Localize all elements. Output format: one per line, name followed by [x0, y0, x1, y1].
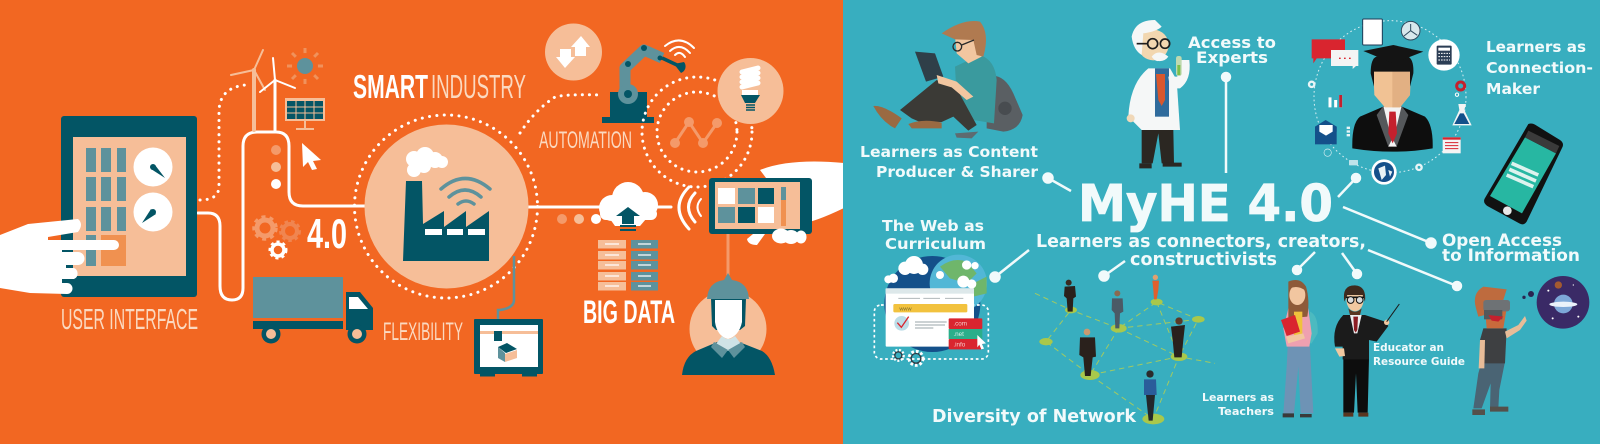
connector lines — [198, 85, 671, 300]
icon: server stacks — [598, 240, 658, 290]
figure: graduate with icons — [1309, 19, 1472, 185]
figure: vr user — [1472, 276, 1589, 415]
connector pins — [990, 73, 1461, 290]
text: learners as teachers: Teachers — [1218, 406, 1274, 418]
icon: light bulb — [718, 58, 784, 124]
dotted rings around trend chart — [642, 77, 752, 187]
icon: cursor — [302, 143, 321, 170]
label: industry: INDUSTRY — [431, 68, 526, 105]
figure: the web illustration: .info — [953, 341, 966, 348]
figure: student reading — [873, 21, 1023, 138]
icon: hand pressing tablet — [0, 219, 119, 294]
icon: fingers under tablet — [747, 228, 806, 245]
icon: wireless signal arcs — [679, 187, 701, 229]
text: open access: Open Access — [1442, 231, 1562, 250]
connector: tablet to worker — [726, 234, 730, 276]
icon: sun — [287, 48, 323, 84]
figure: the web illustration — [874, 255, 988, 365]
text: connection maker — [1486, 38, 1593, 98]
figure: professor — [1127, 20, 1190, 168]
figure: educator — [1334, 285, 1399, 417]
text: connection maker: Maker — [1486, 80, 1540, 98]
icon: wind turbines — [231, 50, 295, 130]
icon: 3d printer — [474, 256, 543, 376]
label: user interface: USER INTERFACE — [61, 304, 198, 336]
figure: diversity network — [1035, 275, 1215, 424]
label: smart: SMART — [353, 68, 428, 105]
text: learners as teachers: Learners as — [1202, 392, 1274, 404]
panel: smart industry — [0, 0, 844, 444]
icon: smart factory — [364, 124, 528, 288]
icon: worker — [682, 273, 775, 375]
text: web as curriculum: Curriculum — [885, 235, 986, 253]
icon: robot arm — [602, 45, 686, 123]
text: learners as connectors: Learners as connectors, creators, — [1036, 232, 1366, 252]
text: access to experts: Experts — [1196, 48, 1268, 67]
icon: smartphone — [1484, 123, 1563, 224]
icon: solar panel — [285, 98, 325, 129]
icon: wifi signal — [665, 40, 694, 57]
text: web as curriculum: The Web as — [882, 217, 984, 235]
text: content producer: Producer & Sharer — [876, 163, 1038, 181]
label: big data: BIG DATA — [583, 294, 675, 330]
text: diversity of network: Diversity of Network — [932, 407, 1136, 427]
icon: cloud upload — [599, 182, 658, 230]
label: 4.0: 4.0 — [307, 210, 347, 257]
text: learners as connectors: constructivists — [1130, 250, 1277, 270]
text: educator — [1373, 342, 1465, 368]
icon: exchange arrows — [545, 24, 602, 80]
text: learners as teachers — [1202, 392, 1274, 418]
panel: myhe 4.0 — [843, 0, 1600, 444]
figure: the web illustration: .net — [953, 331, 964, 338]
figure: the web illustration: .com — [953, 321, 967, 328]
status dots — [271, 145, 281, 189]
heading: myhe 4.0: MyHE 4.0 — [1078, 175, 1333, 234]
figure: the web illustration: www — [898, 306, 913, 312]
text: connection maker: Connection- — [1486, 59, 1593, 77]
text: learners as connectors — [1036, 232, 1366, 270]
figure: learner teacher — [1281, 280, 1318, 417]
text: educator: Educator an — [1373, 342, 1444, 354]
data dots — [557, 214, 601, 224]
icon: truck — [253, 277, 373, 344]
tablet: user interface — [61, 116, 197, 297]
text: content producer: Learners as Content — [860, 143, 1039, 161]
label: flexibility: FLEXIBILITY — [383, 318, 463, 346]
icon: trend line — [670, 117, 722, 148]
icon: gears — [254, 217, 300, 258]
text: educator: Resource Guide — [1373, 356, 1465, 368]
text: open access — [1442, 231, 1580, 265]
label: automation: AUTOMATION — [539, 127, 632, 154]
text: connection maker: Learners as — [1486, 38, 1586, 56]
text: access to experts — [1188, 33, 1276, 67]
text: open access: to Information — [1442, 246, 1580, 265]
text: content producer — [860, 143, 1039, 181]
text: access to experts: Access to — [1188, 33, 1276, 52]
tablet: dashboard — [709, 178, 812, 234]
text: web as curriculum — [882, 217, 986, 253]
icon: hand holding tablet — [760, 162, 844, 224]
dotted ring around factory — [354, 115, 538, 298]
